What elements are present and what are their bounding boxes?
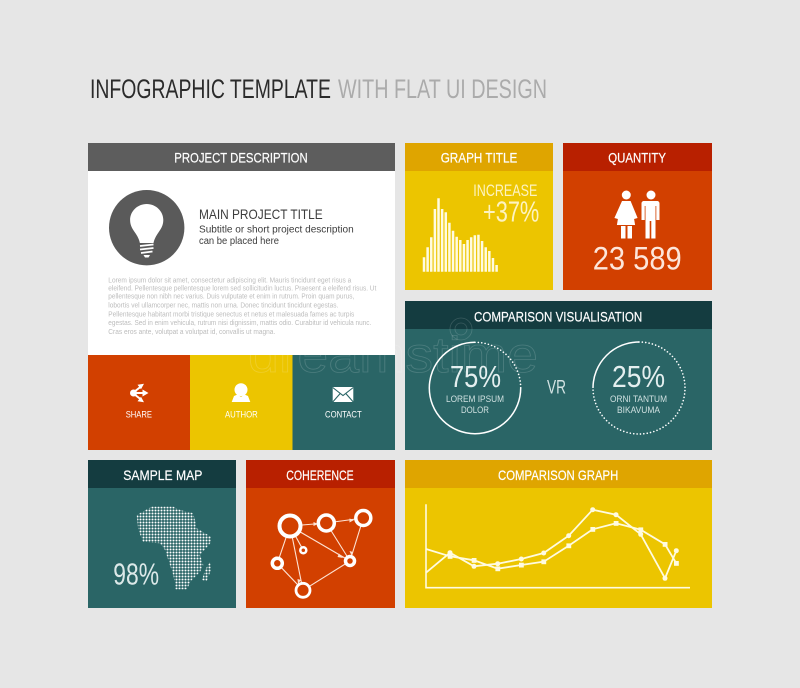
icon: author [232,383,250,402]
label: increase: INCREASE [473,181,537,200]
chart: 25% ring [593,342,685,434]
body text [108,278,376,336]
tile: contact [292,355,395,450]
label: share: SHARE [126,409,152,420]
bar chart [424,198,497,272]
line chart [426,504,690,588]
label: lorem ipsum dolor: DOLOR [461,405,489,416]
panel: graph title [405,143,553,290]
heading: quantity: QUANTITY [608,150,667,166]
icon: woman and man [614,190,660,238]
icon: envelope [333,387,353,402]
heading: coherence: COHERENCE [286,467,354,483]
value: 75%: 75% [450,359,501,394]
value: 98%: 98% [113,556,159,591]
subtitle: can be placed here [199,236,279,247]
label: lorem ipsum dolor [446,394,504,416]
icon: light bulb [109,190,184,265]
map: dotted africa [137,507,211,589]
tile: author [190,355,292,450]
value: +37%: +37% [483,197,539,229]
panel: comparison graph [405,460,712,608]
heading: project description: PROJECT DESCRIPTION [174,150,308,166]
label: lorem ipsum dolor: LOREM IPSUM [446,394,504,405]
body text: Pellentesque habitant morbi tristique senectus et netus et malesuada fames ac turpis [108,312,355,319]
body text: Lorem ipsum dolor sit amet, consectetur adipiscing elit. Mauris tincidunt eget risus a [108,278,351,285]
label: vr: VR [547,378,566,399]
main project title: MAIN PROJECT TITLE [199,206,323,222]
title: WITH FLAT UI DESIGN [338,74,547,104]
subtitle [199,224,354,247]
body text: pellentesque non nibh nec varius. Duis vulputate et enim in rutrum. Proin quam purus, [108,294,354,301]
label: contact: CONTACT [325,409,362,420]
label: orni tantum bikavuma: ORNI TANTUM [610,394,667,405]
title: INFOGRAPHIC TEMPLATE [90,74,331,104]
body text: lobortis vel ullamcorper nec, mattis non urna. Donec tincidunt tincidunt egestas. [108,303,338,310]
heading: graph title: GRAPH TITLE [441,150,517,166]
panel: coherence [246,460,395,608]
panel: project description [88,143,395,355]
heading: comparison graph: COMPARISON GRAPH [498,467,618,483]
network diagram [272,510,371,597]
label: orni tantum bikavuma [610,394,667,416]
body text: Cras eros ante, volutpat a volutpat id, convallis ut magna. [108,329,275,336]
icon: share [130,384,148,402]
panel: quantity [563,143,712,290]
label: author: AUTHOR [225,409,258,420]
label: orni tantum bikavuma: BIKAVUMA [617,405,661,416]
body text: egestas. Sed in enim vehicula, rutrum nisi dignissim, mattis odio. Curabitur id vehicula nunc. [108,320,371,327]
value: 23 589: 23 589 [593,240,682,276]
panel: comparison visualisation [405,301,712,450]
value: 25%: 25% [612,359,665,394]
heading: sample map: SAMPLE MAP [123,467,202,483]
chart: 75% ring [429,342,521,434]
heading: comparison visualisation: COMPARISON VISUALISATION [474,308,642,324]
tile: share [88,355,190,450]
panel: sample map [88,460,236,608]
subtitle: Subtitle or short project description [199,224,354,235]
watermark: dreamstime [248,327,538,383]
body text: eleifend. Pellentesque pellentesque lorem sed sollicitudin luctus. Praesent a eleifend risus. Ut [108,286,376,293]
